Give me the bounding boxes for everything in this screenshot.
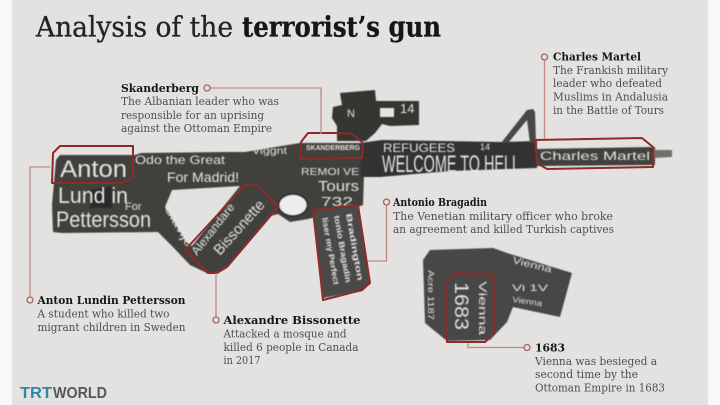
leader: Skanderberg	[204, 85, 321, 134]
text block: 1683: Ottoman Empire in 1683	[535, 382, 665, 394]
handwriting on rifle: Pettersson	[56, 207, 151, 232]
text block: Skanderberg	[121, 82, 279, 135]
rifle illustration	[52, 90, 672, 341]
handwriting on rifle: Viggnt	[252, 146, 287, 157]
highlight: 1683	[447, 273, 495, 342]
leader: Anton Lundin Pettersson	[27, 167, 50, 303]
handwriting on rifle: Bissonette	[210, 197, 268, 259]
text block: 1683: second time by the	[535, 368, 638, 381]
text block: Anton Lundin Pettersson: A student who killed two	[37, 308, 170, 320]
text block: 1683: Vienna was besieged a	[534, 355, 657, 368]
text block: Charles Martel	[553, 50, 669, 117]
title: Analysis of the	[35, 10, 233, 44]
logo: TRT World: TRT	[20, 385, 52, 402]
highlight: Anton	[52, 146, 133, 183]
handwriting on rifle: For Madrid!	[167, 169, 239, 185]
front sight	[501, 109, 536, 143]
logo: TRT World	[20, 385, 107, 402]
title	[35, 10, 441, 44]
handwriting on rifle: Vienna	[511, 255, 553, 276]
magazine	[313, 205, 370, 298]
text block: Charles Martel: Muslims in Andalusia	[553, 90, 668, 104]
highlight: Charles Martel	[535, 138, 653, 169]
highlight: Alexandre Bissonette	[185, 185, 278, 273]
title: terrorist’s gun	[242, 10, 441, 44]
leader: 1683	[468, 343, 530, 350]
stock cut-out detail	[90, 186, 112, 208]
text block: Skanderberg: The Albanian leader who was	[121, 95, 279, 108]
text block: Alexandre Bissonette: killed 6 people in Canada	[224, 341, 359, 354]
handwriting on rifle: 14	[400, 101, 414, 116]
handwriting on rifle: Vienna	[512, 295, 543, 308]
barrel	[536, 147, 655, 166]
handwriting on rifle: Anton	[60, 156, 127, 183]
text block: Antonio Bragadin: The Venetian military officer who broke	[393, 210, 613, 223]
handwriting on rifle: Odo the Great	[135, 153, 226, 167]
text block: Anton Lundin Pettersson	[37, 294, 185, 334]
text block: Anton Lundin Pettersson: migrant children in Sweden	[38, 321, 186, 334]
handwriting on rifle: N	[347, 108, 355, 120]
highlight: Antonio Bragadin	[313, 205, 370, 300]
handwriting on rifle: Alexandare	[188, 200, 238, 258]
text block: Skanderberg: responsible for an uprising	[121, 109, 264, 122]
text block: Antonio Bragadin: an agreement and killed Turkish captives	[393, 223, 614, 236]
text block: Charles Martel: leader who defeated	[553, 77, 662, 90]
handwriting on rifle: 14	[480, 142, 490, 152]
handwriting on rifle	[56, 101, 650, 336]
highlight: Skanderberg	[300, 133, 363, 159]
spare magazine clip	[423, 248, 572, 341]
muzzle	[654, 150, 672, 158]
handwriting on rifle: Acre 1187	[426, 270, 435, 321]
handwriting on rifle: WELCOME TO HELL	[382, 151, 520, 178]
text block: Anton Lundin Pettersson: Anton Lundin Pettersson	[37, 294, 185, 307]
text block: Charles Martel: in the Battle of Tours	[553, 104, 664, 117]
text block: Charles Martel: The Frankish military	[553, 64, 669, 77]
handwriting on rifle: Vienna	[476, 281, 488, 336]
handwriting on rifle: Vi 1V	[512, 283, 548, 293]
leader: Antonio Bragadin	[368, 199, 390, 261]
text block: Skanderberg: Skanderberg	[121, 82, 199, 95]
handwriting on rifle: REFUGEES	[383, 141, 455, 155]
handwriting on rifle: REMOI VE	[301, 167, 359, 178]
leader: Alexandre Bissonette	[213, 273, 219, 323]
handwriting on rifle: Clavijo	[161, 202, 197, 250]
handwriting on rifle: 1683	[450, 282, 471, 330]
text block: Alexandre Bissonette: Attacked a mosque and	[223, 328, 346, 340]
handwriting on rifle: Bradington	[344, 213, 365, 281]
handwriting on rifle: For	[125, 201, 142, 213]
handwriting on rifle: Charles Martel	[540, 149, 650, 163]
text block: Antonio Bragadin	[392, 196, 614, 236]
text block: 1683	[534, 342, 665, 394]
trigger guard opening	[278, 194, 308, 216]
handwriting on rifle: 732	[321, 194, 353, 209]
upper receiver and handguard	[360, 140, 537, 177]
logo: TRT World: WORLD	[53, 385, 107, 402]
text block: Alexandre Bissonette: in 2017	[224, 354, 261, 367]
handwriting on rifle: Tours	[318, 178, 359, 195]
handwriting on rifle: Lund in	[58, 183, 128, 208]
handwriting on rifle: liser my Perfect	[320, 217, 341, 286]
text block: Charles Martel: Charles Martel	[553, 50, 641, 64]
text block: 1683: 1683	[535, 342, 565, 354]
text block: Alexandre Bissonette	[222, 314, 360, 367]
handwriting on rifle: SKANDERBERG	[306, 145, 361, 152]
handwriting on rifle: tonio Bragadin	[332, 215, 353, 283]
text block: Skanderberg: against the Ottoman Empire	[121, 122, 272, 135]
text block: Antonio Bragadin: Antonio Bragadin	[392, 196, 487, 209]
text block: Alexandre Bissonette: Alexandre Bissonette	[222, 314, 360, 327]
leader: Charles Martel	[542, 54, 548, 139]
optic	[332, 90, 419, 141]
stock, lower receiver and grip	[52, 143, 365, 273]
